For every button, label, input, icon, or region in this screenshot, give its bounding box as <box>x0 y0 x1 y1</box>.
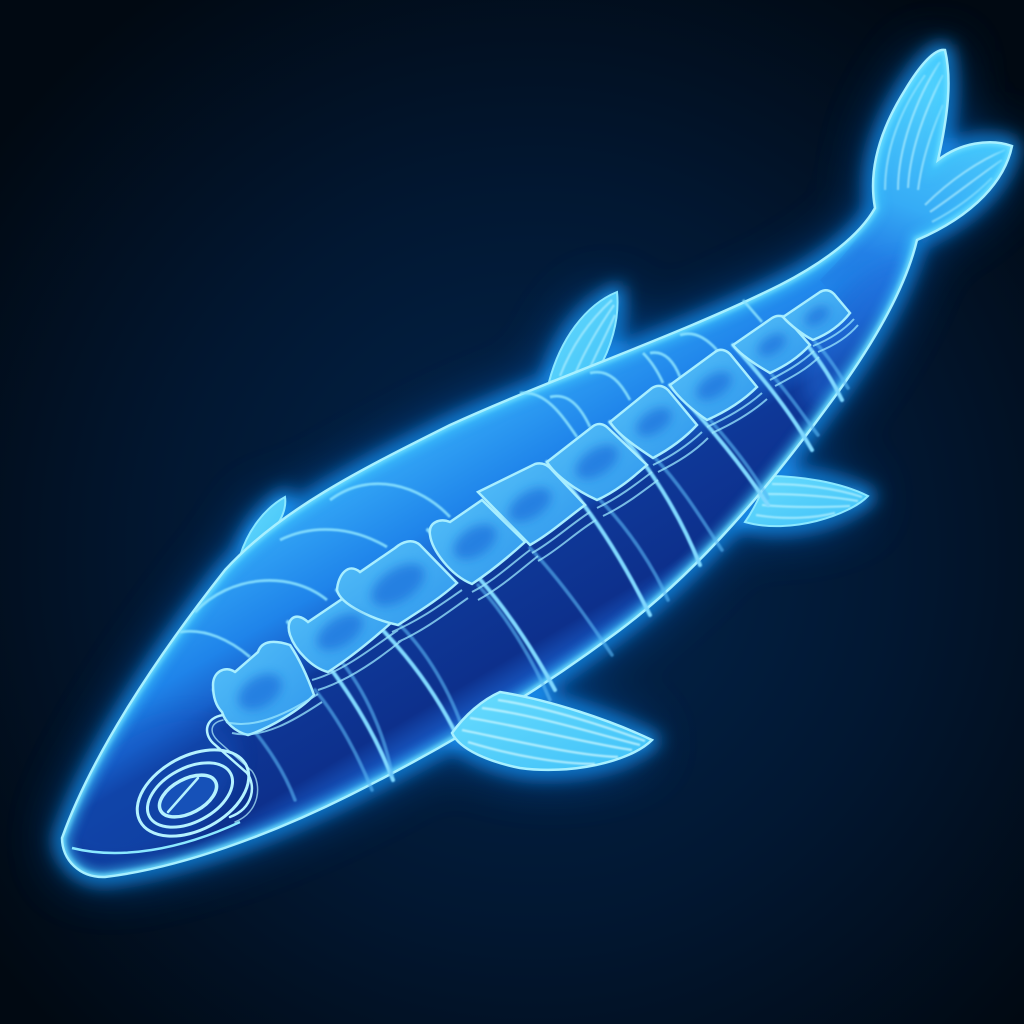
segment 7 <box>610 386 697 458</box>
inner edge glow <box>62 50 1012 877</box>
near glow <box>62 50 1012 877</box>
fin: right pectoral <box>745 476 868 526</box>
segment 2 <box>289 593 392 672</box>
segment 8 <box>670 350 757 420</box>
segment 4 <box>430 500 525 584</box>
segment dark centres <box>232 302 833 718</box>
rear fins <box>240 292 868 556</box>
mouth line <box>72 822 240 853</box>
fish body <box>34 50 1012 897</box>
tail <box>34 50 1012 897</box>
spine segments <box>213 290 858 735</box>
head shading <box>70 725 240 866</box>
segment lower bands <box>226 319 858 734</box>
rear body brightening <box>798 312 880 409</box>
segment 10 <box>783 290 850 340</box>
segment 9 <box>733 316 810 373</box>
rib lines <box>213 317 848 800</box>
body outline <box>62 50 1012 877</box>
upper back arcs <box>180 300 762 657</box>
segment 6 <box>547 424 647 500</box>
fin: dorsal <box>549 292 618 382</box>
outer glow <box>62 50 1012 877</box>
fin: small dorsal <box>240 497 285 556</box>
segment 3 <box>337 541 457 625</box>
fin: lower pectoral <box>452 692 652 770</box>
eye spiral <box>123 715 263 854</box>
segment 5 <box>478 463 585 545</box>
segment 1 <box>213 642 314 735</box>
